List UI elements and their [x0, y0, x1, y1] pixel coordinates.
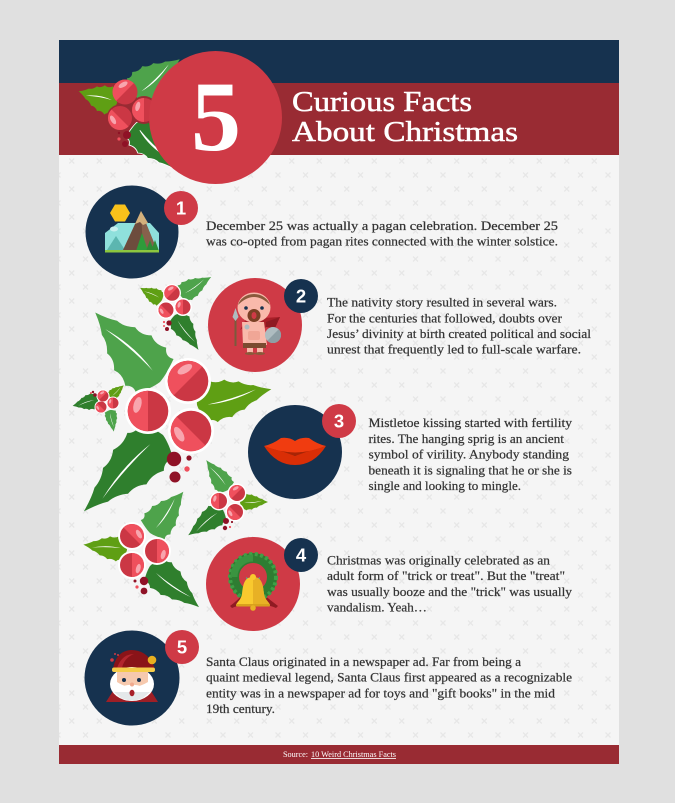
- big circle with 5: [149, 51, 282, 184]
- holly: left small: [71, 381, 127, 433]
- holly: lower right small: [181, 454, 268, 545]
- fact 2: text: Jesus’ divinity at birth created political and social: [327, 327, 591, 341]
- title: About Christmas: [292, 116, 518, 148]
- fact 4: text: was usually booze and the "trick" was usually: [327, 585, 573, 599]
- fact 1: icon circle: 1: [176, 198, 186, 218]
- fact 3: text: symbol of virility. Anybody standing: [368, 448, 570, 462]
- fact 5: text: entity was in a newspaper ad for toys and "gift books" in the mid: [206, 686, 556, 700]
- source text: Source:: [283, 750, 308, 759]
- fact 3: text: [368, 416, 573, 493]
- fact 3: text: single and looking to mingle.: [368, 479, 521, 493]
- title: [292, 86, 518, 148]
- big circle with 5: 5: [191, 61, 241, 172]
- footer band: [59, 745, 619, 764]
- fact 5: text: Santa Claus originated in a newspaper ad. Far from being a: [206, 655, 521, 669]
- fact 2: icon circle: [208, 278, 318, 372]
- fact 5: text: [206, 655, 572, 716]
- icon: warrior: [232, 292, 281, 355]
- fact 5: icon circle: 5: [177, 636, 187, 658]
- fact 2: text: The nativity story resulted in several wars.: [327, 296, 557, 310]
- fact 4: icon circle: 4: [296, 544, 307, 566]
- fact 1: text: was co-opted from pagan rites connected with the winter solstice.: [206, 235, 558, 249]
- holly: header: [74, 44, 192, 180]
- fact 4: text: vandalism. Yeah…: [327, 601, 427, 615]
- fact 3: text: beneath it is signaling that he or she is: [368, 463, 572, 477]
- fact 3: icon circle: 3: [334, 410, 344, 432]
- holly: top small: [136, 268, 216, 356]
- holly: large central: [66, 293, 276, 530]
- fact 4: icon circle: [206, 537, 318, 631]
- icon: lips: [264, 438, 326, 465]
- fact 4: text: Christmas was originally celebrated as an: [327, 553, 551, 567]
- fact 2: icon circle: 2: [296, 286, 306, 306]
- icon: santa: [106, 650, 158, 702]
- fact 3: text: Mistletoe kissing started with fertility: [368, 416, 573, 430]
- fact 1: icon circle: [86, 186, 198, 278]
- fact 4: text: adult form of "trick or treat". But the "treat": [327, 569, 565, 583]
- fact 4: text: [327, 553, 573, 615]
- fact 2: text: [327, 296, 591, 357]
- holly: fourth cluster: [82, 481, 210, 620]
- fact 3: icon circle: [248, 404, 356, 499]
- fact 5: text: 19th century.: [206, 702, 275, 716]
- fact 2: text: For the centuries that followed, doubts over: [327, 311, 563, 325]
- fact 5: text: quaint medieval legend, Santa Claus first appeared as a recognizable: [206, 671, 572, 685]
- fact 1: text: [206, 219, 558, 249]
- header band: [59, 40, 619, 155]
- fact 1: text: December 25 was actually a pagan celebration. December 25: [206, 219, 558, 233]
- fact 2: text: unrest that frequently led to full-scale warfare.: [327, 343, 581, 357]
- icon: mountain landscape: [105, 204, 159, 252]
- fact 3: text: rites. The hanging sprig is an ancient: [368, 432, 564, 446]
- title: Curious Facts: [292, 86, 472, 118]
- icon: wreath with bell: [230, 554, 278, 611]
- fact 5: icon circle: [84, 630, 199, 726]
- source text: 10 Weird Christmas Facts: [311, 750, 396, 759]
- panel: card: [59, 40, 619, 764]
